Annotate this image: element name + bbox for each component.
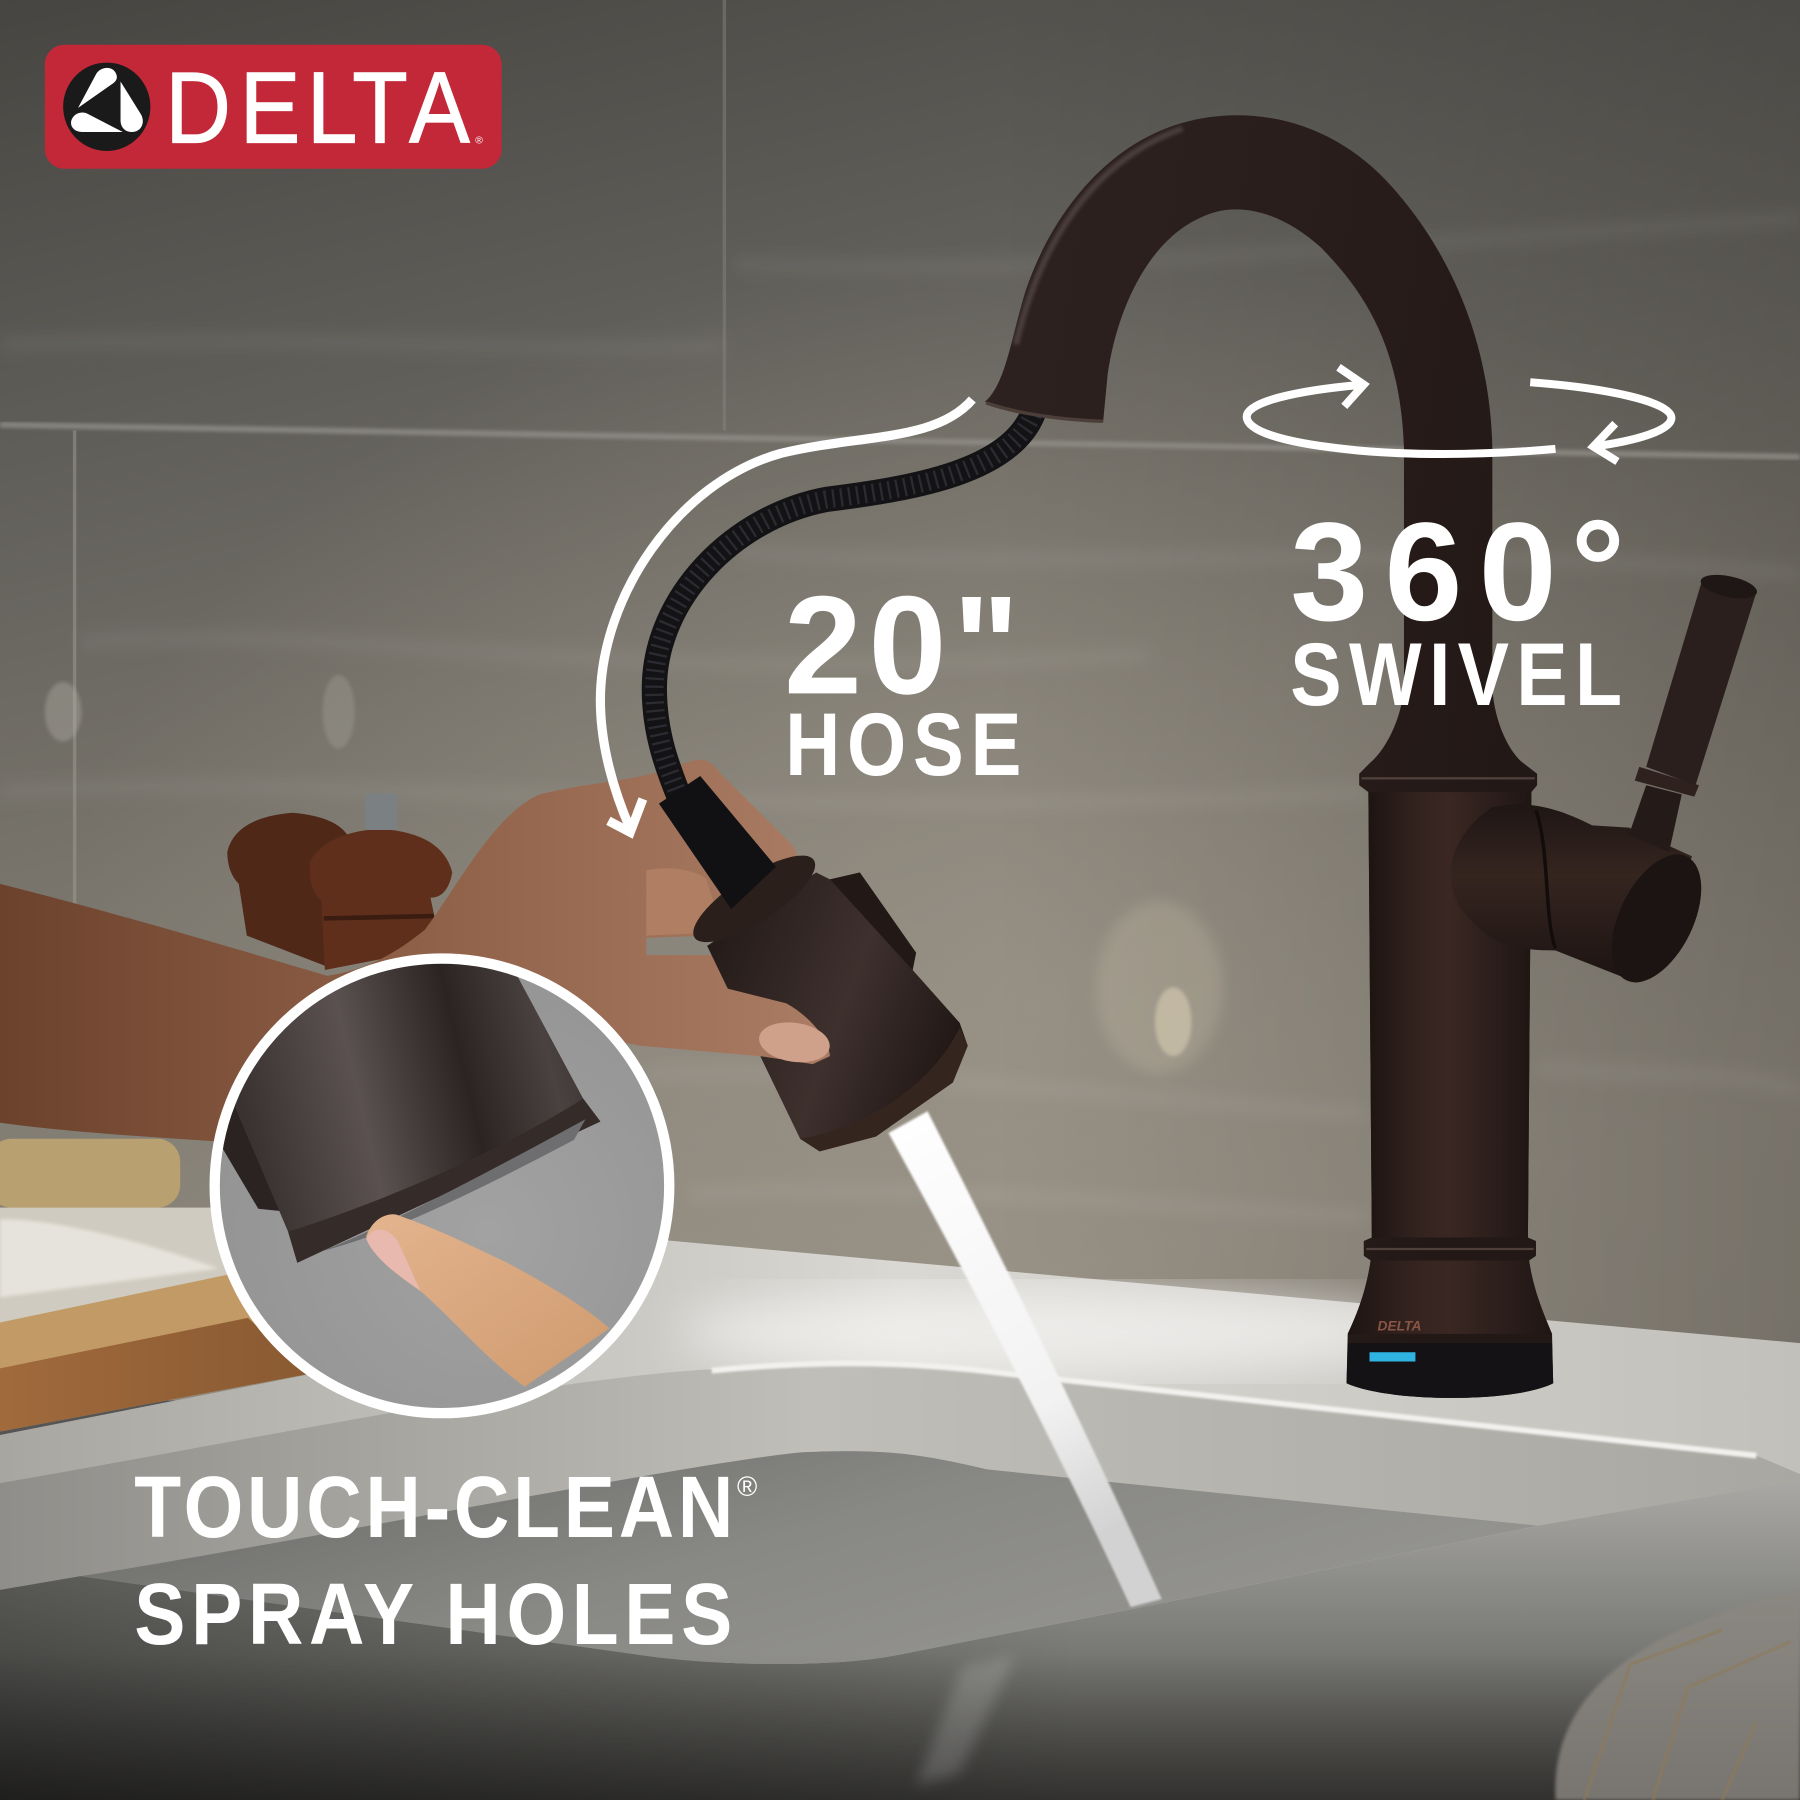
faucet handle — [1451, 571, 1759, 996]
faucet: spout and body: DELTA — [1378, 1318, 1421, 1333]
pull-down hose — [654, 413, 1033, 804]
background: tiled wall — [0, 0, 1800, 1401]
inset: touch-clean spray holes — [195, 941, 669, 1413]
water stream — [889, 1111, 1162, 1607]
callout: 360 swivel: ° — [1569, 492, 1627, 652]
callout: touch-clean spray holes: TOUCH-CLEAN — [134, 1460, 733, 1556]
callout: 360 swivel — [1290, 492, 1627, 724]
callout: touch-clean spray holes: ® — [737, 1471, 757, 1502]
callout: touch-clean spray holes — [134, 1460, 757, 1663]
arrow: 360 degree swivel — [1247, 367, 1671, 461]
logo: Delta — [45, 45, 502, 169]
logo: Delta: DELTA — [165, 52, 470, 164]
arrow: hose reach — [600, 399, 972, 832]
pepper mills — [227, 793, 452, 970]
faucet: spout and body — [985, 115, 1553, 1398]
logo: Delta: ® — [475, 135, 483, 146]
callout: touch-clean spray holes: SPRAY HOLES — [134, 1566, 732, 1663]
callout: 360 swivel: 360 — [1290, 493, 1557, 650]
arm and hand — [0, 760, 804, 1142]
finger over wand — [551, 967, 832, 1067]
callout: 20 inch hose: 20" — [784, 566, 1019, 723]
countertop and sink — [0, 1234, 1800, 1800]
callout: 20 inch hose — [784, 566, 1021, 794]
rolling pin and cutting board with flour — [0, 1139, 308, 1432]
pull-down wand — [659, 776, 968, 1151]
callout: 360 swivel: SWIVEL — [1290, 623, 1622, 724]
callout: 20 inch hose: HOSE — [785, 694, 1021, 794]
